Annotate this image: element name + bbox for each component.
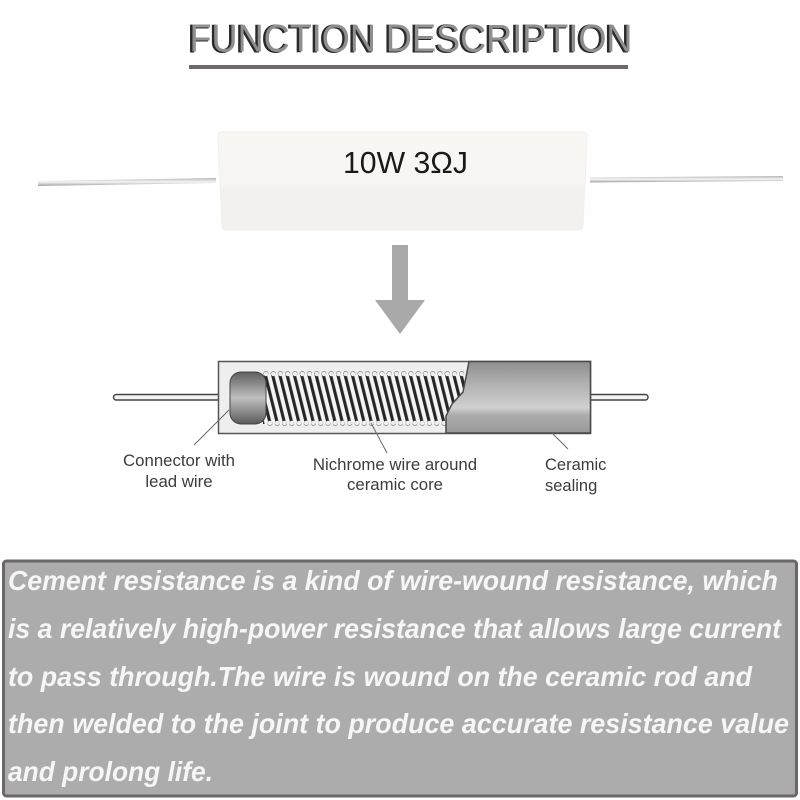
label: connector: lead wire [145, 472, 213, 491]
label: nichrome: ceramic core [347, 475, 443, 494]
right lead wire [590, 176, 783, 182]
casing [218, 362, 590, 434]
leader line: ceramic [552, 433, 568, 449]
resistor photo [38, 132, 783, 230]
leader line: nichrome [371, 423, 387, 453]
label: nichrome: Nichrome wire around [313, 455, 477, 474]
leader line: connector [194, 410, 229, 445]
coil scallop edges [266, 374, 467, 424]
resistor cutaway diagram [114, 362, 648, 495]
nichrome coil [263, 373, 467, 424]
coil core shadow [262, 380, 278, 422]
left lead [114, 394, 234, 400]
arrow down [375, 245, 425, 334]
description text: Cement resistance is a kind of wire-wound resistance, which [8, 565, 778, 596]
description panel [4, 561, 797, 796]
resistor body [218, 132, 587, 230]
label: ceramic: sealing [545, 477, 597, 495]
right lead [588, 394, 648, 400]
description text: then welded to the joint to produce accurate resistance value [8, 708, 789, 739]
label: ceramic: Ceramic [545, 456, 606, 474]
left lead wire [38, 178, 216, 186]
resistor marking: 10W 3ΩJ [343, 145, 468, 180]
panel background [4, 561, 796, 796]
ceramic sealing [446, 362, 590, 433]
description text: to pass through.The wire is wound on the ceramic rod and [8, 661, 753, 692]
connector [230, 372, 266, 424]
title: FUNCTION DESCRIPTION [188, 18, 630, 61]
description text: is a relatively high-power resistance that allows large current [8, 613, 783, 644]
description text: and prolong life. [8, 756, 213, 787]
label: connector: Connector with [123, 451, 235, 470]
title: FUNCTION DESCRIPTION [190, 18, 632, 60]
coil scallop highlights [266, 374, 467, 423]
title underline [189, 65, 628, 69]
